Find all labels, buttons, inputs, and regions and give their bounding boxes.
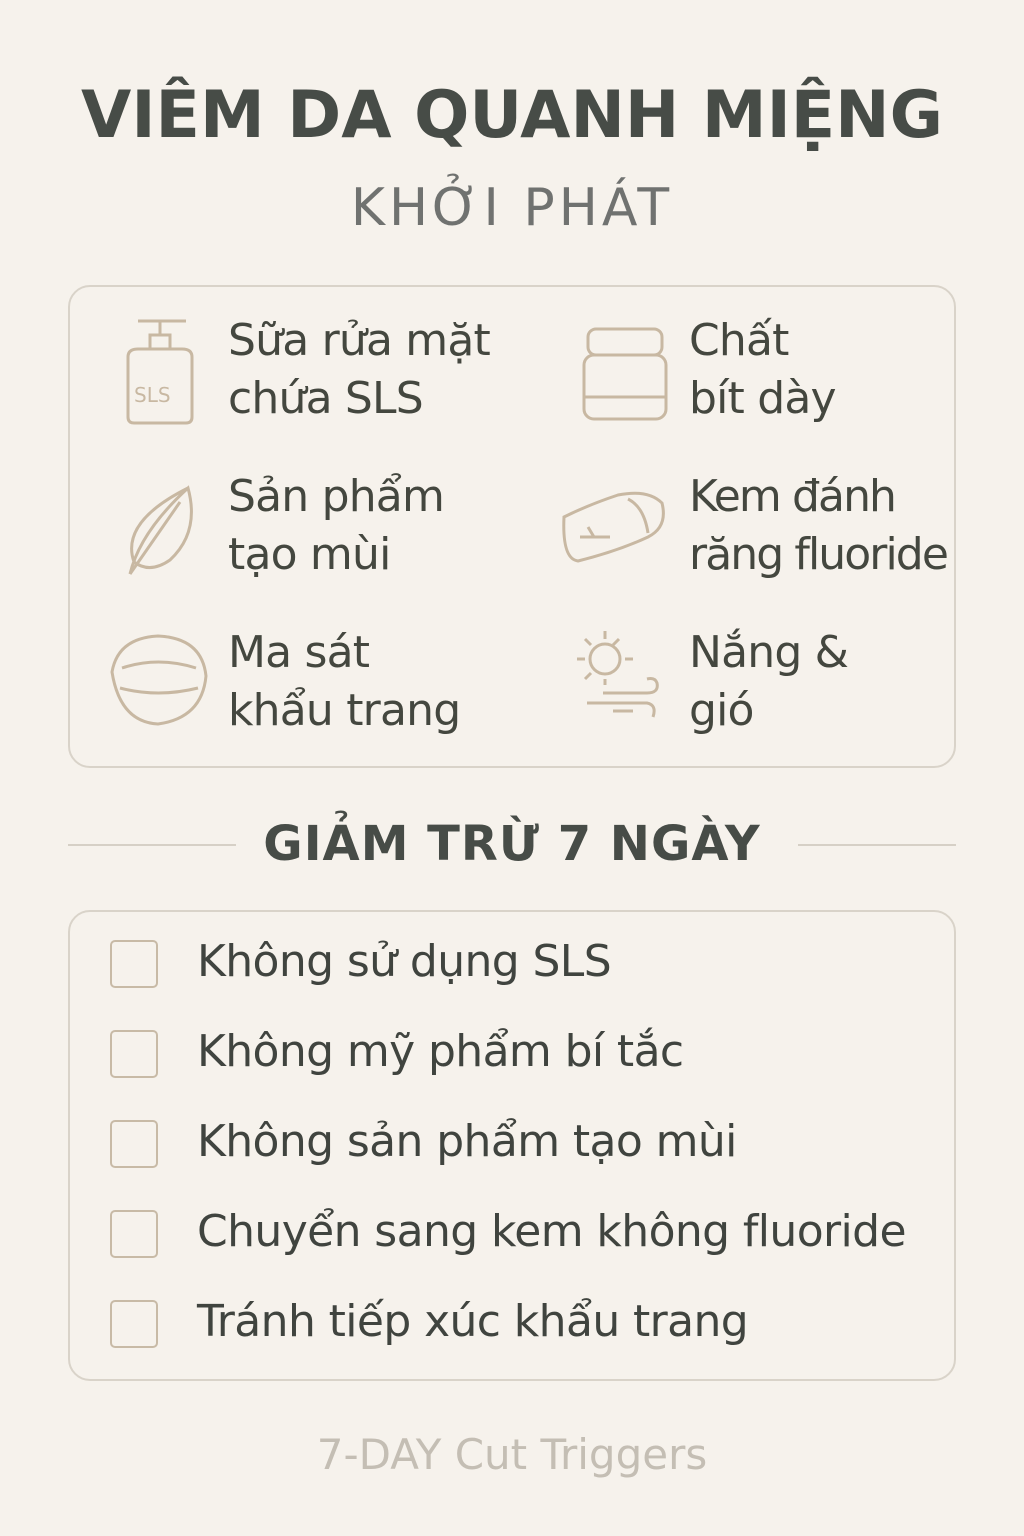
checklist items: Không sử dụng SLS [197, 936, 611, 987]
text: sua rua mat: Sữa rửa mặt [228, 315, 490, 366]
checklist items: Tránh tiếp xúc khẩu trang [197, 1296, 748, 1347]
text: kem danh rang: Kem đánh [689, 471, 895, 522]
item 2 [110, 1030, 158, 1078]
text: sua rua mat [228, 315, 490, 424]
text: kem danh rang: răng fluoride [689, 529, 947, 580]
icon: jar [582, 328, 668, 420]
icon: sun and wind [577, 631, 659, 718]
item 1 [110, 940, 158, 988]
footer: 7-DAY Cut Triggers [317, 1430, 707, 1479]
item 4 [110, 1210, 158, 1258]
title: VIÊM DA QUANH MIỆNG [81, 78, 943, 153]
text: nang gio: Nắng & [689, 627, 848, 678]
checklist items [110, 936, 906, 1348]
checklist items: Chuyển sang kem không fluoride [197, 1206, 906, 1257]
checklist items: Không sản phẩm tạo mùi [197, 1116, 737, 1167]
panel: checklist [68, 910, 956, 1381]
text: chat bit day [689, 315, 836, 424]
icon: leaf [128, 485, 193, 575]
text: nang gio: gió [689, 685, 754, 736]
text: sua rua mat: chứa SLS [228, 373, 423, 424]
checklist items: Không mỹ phẩm bí tắc [197, 1026, 684, 1077]
panel: triggers [68, 285, 956, 768]
text: ma sat khau trang: khẩu trang [228, 685, 460, 736]
item 3 [110, 1120, 158, 1168]
text: ma sat khau trang [228, 627, 460, 736]
text: chat bit day: bít dày [689, 373, 836, 424]
text: san pham tao mui: Sản phẩm [228, 471, 444, 522]
text: kem danh rang [689, 471, 947, 580]
icon: toothpaste [562, 492, 665, 562]
subtitle: KHỞI PHÁT [351, 178, 673, 238]
text: ma sat khau trang: Ma sát [228, 627, 369, 678]
text: chat bit day: Chất [689, 315, 789, 366]
text: san pham tao mui [228, 471, 444, 580]
section heading: GIẢM TRỪ 7 NGÀY [263, 816, 761, 872]
icon: SLS bottle: SLS [134, 383, 171, 407]
text: san pham tao mui: tạo mùi [228, 529, 390, 580]
text: nang gio [689, 627, 848, 736]
icon: SLS bottle [126, 320, 194, 424]
icon: mask [110, 634, 208, 726]
item 5 [110, 1300, 158, 1348]
